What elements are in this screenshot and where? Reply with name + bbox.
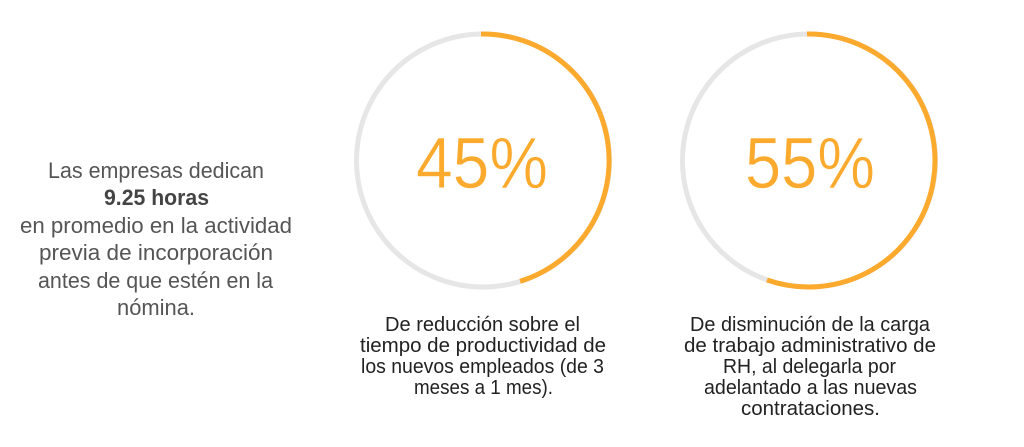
caption: 55% HR workload: de trabajo administrativo de — [684, 334, 936, 357]
text block: onboarding hours: nómina. — [117, 295, 195, 320]
text block: onboarding hours: en promedio en la actividad — [20, 213, 292, 238]
caption: 55% HR workload: adelantado a las nuevas — [704, 376, 917, 399]
donut chart: 45%: 45% — [416, 124, 548, 204]
caption: 45% productivity: los nuevos empleados (de 3 — [361, 355, 604, 378]
donut chart: 55% — [682, 34, 936, 287]
caption: 45% productivity — [360, 313, 606, 399]
text block: onboarding hours: antes de que estén en la — [38, 268, 274, 293]
text block: onboarding hours — [20, 158, 292, 320]
text block: onboarding hours: previa de incorporación — [39, 240, 273, 265]
caption: 45% productivity: De reducción sobre el — [385, 313, 580, 336]
text block: onboarding hours: Las empresas dedican — [48, 158, 264, 183]
caption: 55% HR workload: RH, al delegarla por — [723, 355, 896, 378]
caption: 45% productivity: meses a 1 mes). — [414, 376, 553, 399]
caption: 55% HR workload: contrataciones. — [741, 397, 880, 420]
caption: 55% HR workload: De disminución de la carga — [690, 313, 931, 336]
text block: onboarding hours: 9.25 horas — [104, 185, 209, 210]
caption: 55% HR workload — [684, 313, 936, 420]
donut chart: 55%: 55% — [745, 124, 875, 204]
donut chart: 45% — [356, 34, 610, 287]
caption: 45% productivity: tiempo de productividad de — [360, 334, 606, 357]
